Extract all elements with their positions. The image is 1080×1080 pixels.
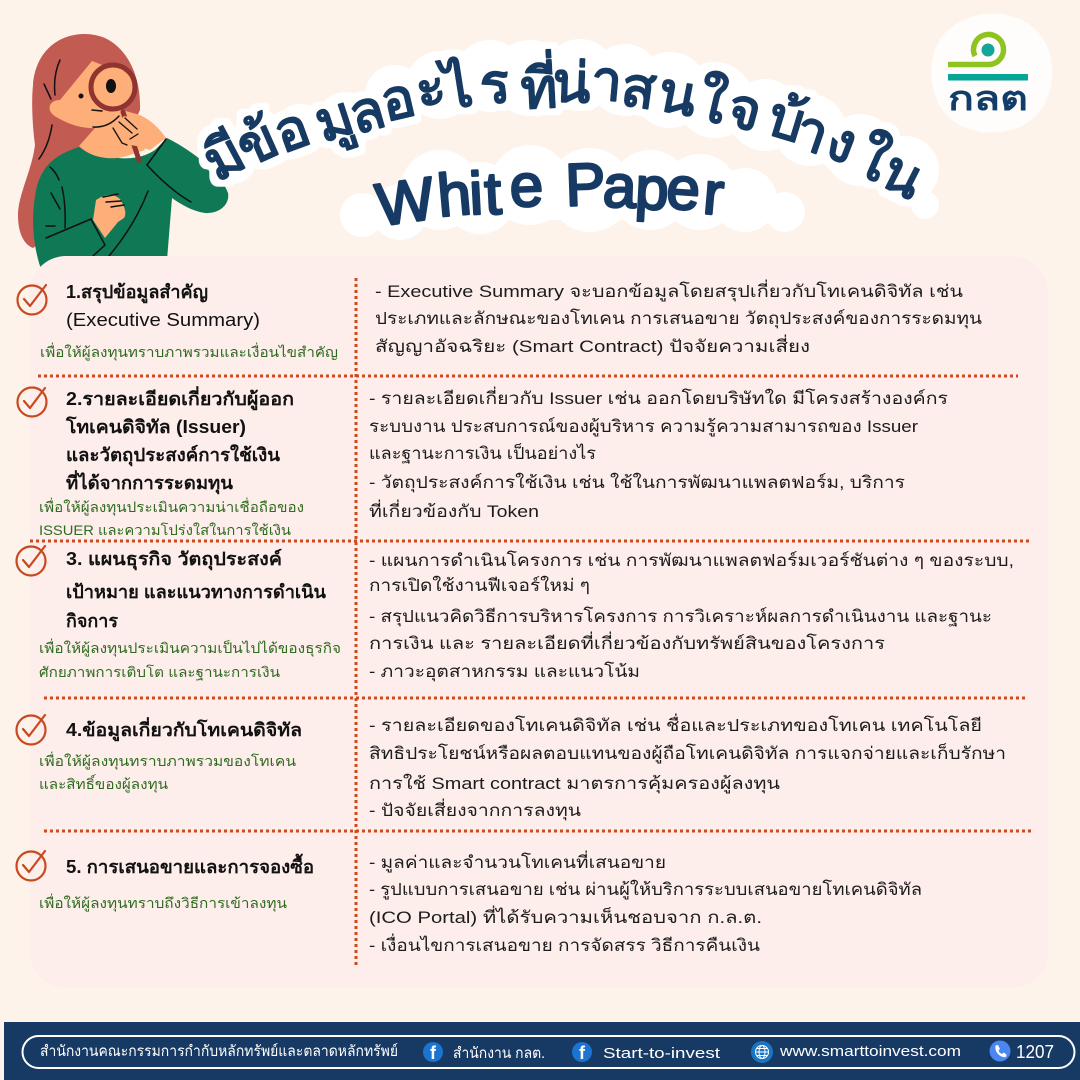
title: line 2 White Paper: i	[468, 160, 484, 227]
right column: item 1 details: - Executive Summary จะบอกข้อมูลโดยสรุปเกี่ยวกับโทเคนดิจิทัล เช่น	[375, 279, 963, 302]
right column: item 5 details: - มูลค่าและจำนวนโทเคนที่เสนอขาย	[369, 850, 666, 873]
icon: check 5	[16, 851, 46, 880]
footer: facebook name 2: Start-to-invest	[603, 1045, 721, 1062]
title: line 2 White Paper: t	[483, 160, 503, 227]
right column: item 5 details	[369, 850, 922, 955]
left column: item 2: 2.รายละเอียดเกี่ยวกับผู้ออก	[66, 386, 294, 411]
icon: facebook 1	[423, 1042, 443, 1063]
right column: item 3 details: การเปิดใช้งานฟีเจอร์ใหม่ ๆ	[369, 575, 590, 595]
right column: item 3 details	[369, 550, 1014, 682]
left column: item 5: 5. การเสนอขายและการจองซื้อ	[66, 853, 314, 877]
icon: check 1	[18, 285, 46, 314]
title: line 1: ะ	[410, 53, 451, 121]
icon: globe	[751, 1041, 773, 1063]
icon: check 4	[16, 715, 46, 744]
title: line 1: ส	[617, 54, 660, 121]
title: line 1: น	[871, 138, 934, 211]
right column: item 2 details: และฐานะการเงิน เป็นอย่างไร	[369, 442, 596, 464]
title: line 1: ง	[818, 107, 866, 176]
title: line 1: า	[787, 97, 837, 166]
left column: item 2	[39, 386, 304, 538]
title: line 2 White Paper: e	[664, 154, 702, 223]
left column: item 4: และสิทธิ์ของผู้ลงทุน	[39, 774, 168, 793]
right column: item 2 details: ระบบงาน ประสบการณ์ของผู้บริหาร ความรู้ความสามารถของ Issuer	[369, 417, 918, 437]
title: line 1: มู	[307, 83, 362, 157]
left column: item 1: 1.สรุปข้อมูลสำคัญ	[66, 282, 208, 304]
left column: item 3: กิจการ	[66, 611, 118, 631]
left column: item 3	[39, 548, 341, 681]
right column: item 2 details: - รายละเอียดเกี่ยวกับ Issuer เช่น ออกโดยบริษัทใด มีโครงสร้างองค์กร	[369, 386, 948, 408]
left column: item 2: ISSUER และความโปร่งใสในการใช้เงิน	[39, 522, 291, 538]
right column: item 3 details: - ภาวะอุตสาหกรรม และแนวโน้ม	[369, 661, 640, 682]
left column: item 5: เพื่อให้ผู้ลงทุนทราบถึงวิธีการเข้าลงทุน	[39, 894, 287, 912]
title: line 1: ข้	[227, 106, 287, 179]
title: line 2 White Paper: r	[701, 159, 727, 228]
icon: facebook 2	[572, 1042, 592, 1063]
left column: item 1	[40, 282, 338, 361]
left column: item 3: ศักยภาพการเติบโต และฐานะการเงิน	[39, 664, 280, 681]
icon: check 3	[16, 546, 46, 576]
title: line 1: ใ	[848, 125, 898, 194]
title: line 1: ที่	[519, 49, 559, 121]
right column: item 2 details: ที่เกี่ยวข้องกับ Token	[369, 499, 539, 521]
footer: website: www.smarttoinvest.com	[779, 1043, 961, 1060]
title: line 2 White Paper: W	[372, 164, 439, 239]
title: line 1: ล	[341, 76, 392, 146]
left column: item 3: เพื่อให้ผู้ลงทุนประเมินความเป็นไปได้ของธุรกิจ	[39, 639, 341, 657]
left column: item 2: โทเคนดิจิทัล (Issuer)	[65, 416, 246, 437]
title: line 1: น	[653, 59, 703, 128]
left column: item 1: (Executive Summary)	[66, 310, 260, 330]
title: line 1: ใ	[692, 68, 733, 136]
title: line 1: ร	[476, 51, 513, 117]
right column: item 2 details	[369, 386, 948, 521]
left column: item 4	[39, 717, 302, 793]
title: line 2 White Paper: a	[602, 152, 638, 221]
icon: facebook 1: f	[430, 1043, 437, 1063]
title cloud backdrop	[208, 39, 939, 240]
right column: item 2 details: - วัตถุประสงค์การใช้เงิน เช่น ใช้ในการพัฒนาแพลตฟอร์ม, บริการ	[369, 472, 905, 493]
icon: check 2	[18, 388, 46, 416]
left column: item 5	[39, 853, 314, 912]
right column: item 5 details: (ICO Portal) ที่ได้รับความเห็นชอบจาก ก.ล.ต.	[369, 905, 762, 927]
title: line 2 White Paper: e	[508, 151, 544, 220]
left column: item 3: เป้าหมาย และแนวทางการดำเนิน	[66, 582, 327, 602]
right column: item 4 details: สิทธิประโยชน์หรือผลตอบแทนของผู้ถือโทเคนดิจิทัล การแจกจ่ายและเก็บรักษา	[369, 742, 1006, 764]
title: line 1	[193, 48, 934, 211]
title: line 1: บ้	[760, 84, 813, 155]
logo: SEC Thailand	[931, 14, 1052, 133]
dotted table dividers	[30, 278, 1032, 965]
title: line 1: อ	[265, 94, 318, 165]
title: line 2 White Paper: h	[435, 160, 474, 229]
left column: item 3: 3. แผนธุรกิจ วัตถุประสงค์	[66, 548, 282, 571]
right column: item 1 details: ประเภทและลักษณะของโทเคน การเสนอขาย วัตถุประสงค์ของการระดมทุน	[375, 308, 982, 329]
right column: item 5 details: - รูปแบบการเสนอขาย เช่น ผ่านผู้ให้บริการระบบเสนอขายโทเคนดิจิทัล	[369, 879, 922, 900]
title: line 1: จ	[721, 74, 769, 144]
right column: item 4 details: - ปัจจัยเสี่ยงจากการลงทุน	[369, 798, 581, 821]
right column: item 5 details: - เงื่อนไขการเสนอขาย การจัดสรร วิธีการคืนเงิน	[369, 933, 760, 955]
panel: content background	[30, 256, 1048, 988]
title: line 2 White Paper: P	[564, 150, 606, 219]
illustration: woman with magnifying glass	[18, 34, 228, 272]
title: line 2 White Paper	[372, 150, 727, 239]
left column: item 4: เพื่อให้ผู้ลงทุนทราบภาพรวมของโทเคน	[39, 752, 296, 770]
right column: item 4 details	[369, 713, 1006, 821]
footer: organisation name: สำนักงานคณะกรรมการกำกับหลักทรัพย์และตลาดหลักทรัพย์	[40, 1043, 398, 1060]
right column: item 4 details: การใช้ Smart contract มาตรการคุ้มครองผู้ลงทุน	[369, 773, 780, 794]
left column: item 4: 4.ข้อมูลเกี่ยวกับโทเคนดิจิทัล	[66, 717, 302, 742]
logo: SEC Thailand: กลต	[948, 80, 1028, 118]
left column: item 2: ที่ได้จากการระดมทุน	[66, 470, 234, 495]
left column: item 1: เพื่อให้ผู้ลงทุนทราบภาพรวมและเงื่อนไขสำคัญ	[40, 343, 338, 361]
title: line 2 White Paper: p	[634, 154, 670, 223]
icon: facebook 2: f	[579, 1043, 586, 1063]
right column: item 3 details: - สรุปแนวคิดวิธีการบริหารโครงการ การวิเคราะห์ผลการดำเนินงาน และฐานะ	[369, 606, 992, 627]
left column: item 2: และวัตถุประสงค์การใช้เงิน	[66, 444, 281, 467]
title: line 1: มี	[193, 120, 255, 193]
title: line 1: อ	[374, 65, 421, 133]
title: line 1: า	[588, 48, 625, 113]
right column: item 3 details: การเงิน และ รายละเอียดที่เกี่ยวข้องกับทรัพย์สินของโครงการ	[369, 631, 885, 653]
icon: phone	[990, 1040, 1010, 1062]
footer: hotline: 1207	[1016, 1042, 1054, 1062]
title: line 1: น่	[551, 50, 592, 115]
title: line 1: ไ	[435, 54, 477, 122]
footer: facebook name 1: สำนักงาน กลต.	[453, 1045, 545, 1062]
footer bar	[4, 1022, 1080, 1080]
left column: item 2: เพื่อให้ผู้ลงทุนประเมินความน่าเชื่อถือของ	[39, 498, 304, 516]
right column: item 1 details: สัญญาอัจฉริยะ (Smart Contract) ปัจจัยความเสี่ยง	[375, 334, 810, 356]
right column: item 1 details	[375, 279, 982, 356]
right column: item 3 details: - แผนการดำเนินโครงการ เช่น การพัฒนาแพลตฟอร์มเวอร์ชันต่าง ๆ ของระบบ,	[369, 550, 1014, 570]
right column: item 4 details: - รายละเอียดของโทเคนดิจิทัล เช่น ชื่อและประเภทของโทเคน เทคโนโลยี	[369, 713, 982, 735]
